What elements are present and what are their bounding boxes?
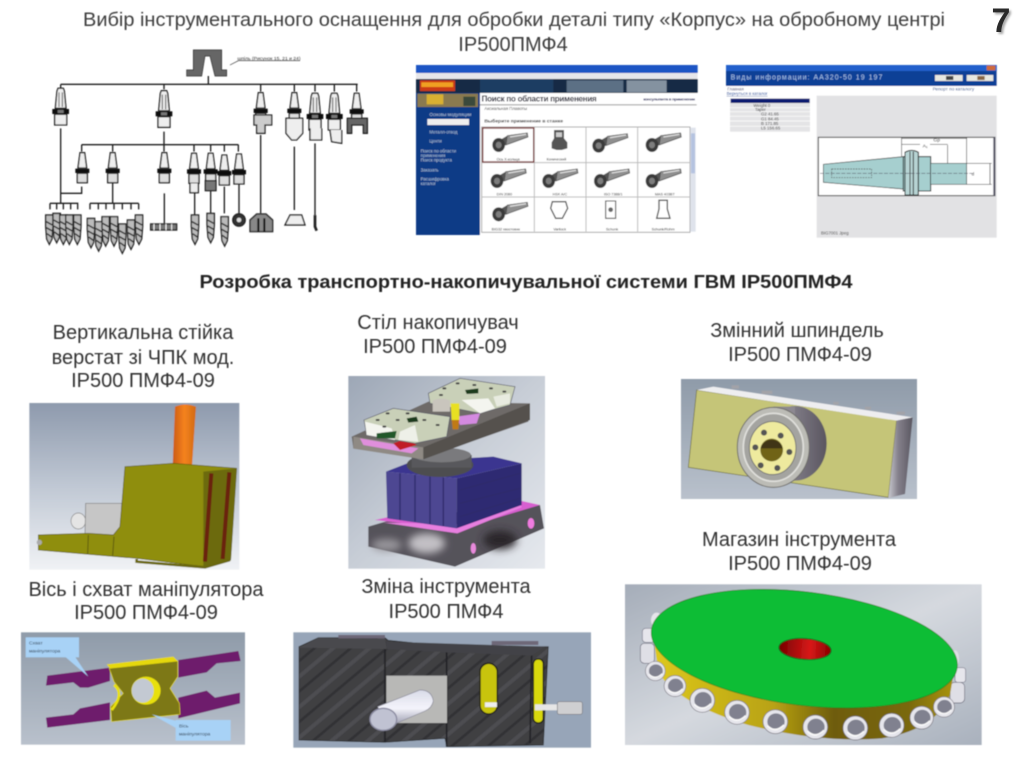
dark housing — [299, 635, 548, 747]
title: ІР500ПМФ4 — [458, 34, 568, 56]
caption: manipulator axis: ІР500 ПМФ4-09 — [74, 602, 218, 624]
tool holder drawing — [818, 137, 995, 196]
panel: replaceable spindle render — [681, 379, 917, 499]
callout: gripper: Схват — [29, 640, 43, 646]
tool thumbnails grid: HSK A/C — [553, 193, 567, 197]
caption: storage table — [357, 312, 519, 358]
window background — [726, 65, 997, 238]
caption: tool change: Зміна інструмента — [361, 576, 532, 598]
left navigation panel: Металл-отвод — [429, 130, 458, 135]
caption: manipulator axis: Вісь і схват маніпулятора — [28, 579, 264, 601]
caption: vertical stand: верстат зі ЧПК мод. — [52, 347, 234, 369]
left navigation panel — [416, 93, 480, 235]
tool sockets on rim — [645, 661, 954, 740]
yellow slots — [480, 659, 543, 723]
panel background — [293, 632, 591, 748]
lower row of holders — [75, 153, 246, 193]
tool thumbnails grid — [482, 127, 696, 232]
rear sockets — [640, 613, 966, 703]
panel background — [625, 584, 982, 745]
scheme connecting lines — [50, 76, 358, 223]
tool holder drawing: d — [972, 172, 975, 177]
caption: replaceable spindle — [710, 320, 884, 366]
panel background — [21, 632, 245, 745]
sub header links — [727, 86, 975, 96]
drawing caption: BIG7001 Jpeg — [821, 230, 849, 235]
parameters table: Weight 0 — [753, 103, 771, 108]
parameters table: L5 156.65 — [761, 126, 781, 131]
parameters table: B 171.85 — [761, 121, 779, 126]
sub header links: Главная — [727, 86, 744, 91]
olive body — [37, 463, 237, 567]
content area: Аксиальная Плавоты — [484, 106, 527, 111]
left navigation panel: применения — [421, 153, 446, 158]
scheme root: spindle — [187, 50, 301, 76]
left navigation panel: Расшифровка — [421, 176, 450, 181]
slide number: 7 — [992, 2, 1010, 40]
tool thumbnails grid: ISO 7388/1 — [604, 193, 622, 197]
tool thumbnails grid: Schunk/Rohm — [652, 227, 675, 231]
panel: manipulator render — [21, 632, 245, 745]
panel: vertical stand render — [29, 403, 239, 570]
caption: tool change: ІР500 ПМФ4 — [389, 601, 503, 623]
callout: axis — [152, 714, 231, 741]
fixtures on pallet — [364, 378, 515, 443]
right cutters and inserts — [151, 213, 317, 246]
sub header links: Вернуться в каталог — [727, 91, 768, 96]
panel: tool magazine render — [625, 574, 982, 745]
caption: vertical stand: ІР500 ПМФ4-09 — [71, 370, 215, 392]
section heading: Розробка транспортно-накопичувальної системи ГВМ ІР500ПМФ4 — [200, 271, 853, 292]
tool thumbnails grid: BIG32 хвостовик — [492, 227, 520, 231]
spindle cylinder — [737, 406, 827, 487]
rotary cylinder — [407, 448, 473, 477]
upper row of holders — [52, 88, 367, 143]
panel: storage table render — [348, 376, 545, 569]
tool thumbnails grid: Varilock — [553, 227, 566, 231]
scheme root: spindle: шпіль (Рисунок 15, 21 и 24) — [237, 56, 301, 62]
tooling scheme diagram — [46, 50, 367, 253]
tool thumbnails grid: Schunk — [606, 227, 618, 231]
tool thumbnails grid: MAS 403BT — [655, 193, 675, 197]
blue header: Виды информации: AA320-50 19 197 — [731, 75, 882, 82]
caption: storage table: Стіл накопичувач — [357, 312, 519, 334]
panel background — [348, 376, 545, 569]
tool thumbnails grid: DIN 2080 — [497, 193, 512, 197]
left navigation panel: каталог — [421, 181, 436, 186]
spindle block — [688, 385, 913, 498]
content area: Выберите применение в станке — [484, 118, 563, 125]
window menu bar — [416, 73, 698, 79]
parameters table — [730, 98, 810, 132]
content area: Поиск по области применения — [482, 95, 597, 104]
window title bar — [416, 65, 698, 73]
caption: tool magazine — [702, 529, 897, 575]
parameters table: Taper — [755, 107, 766, 112]
screenshot: tool information window — [726, 65, 997, 238]
tool holder drawing: A₁ — [923, 143, 928, 149]
violet block — [386, 457, 522, 528]
banner — [416, 79, 698, 93]
tool thumbnails grid: Конический — [547, 158, 566, 162]
caption: vertical stand: Вертикальна стійка — [53, 322, 234, 344]
left cutter cluster — [46, 213, 81, 244]
callout: axis: маніпулятора — [179, 731, 211, 737]
middle cutter cluster — [87, 215, 143, 253]
window and pin — [370, 676, 447, 730]
panel background — [681, 379, 917, 499]
left navigation panel: Поиск продукта — [421, 158, 452, 163]
purple gripper arms — [46, 651, 241, 728]
caption: tool change — [361, 576, 532, 623]
caption: tool magazine: ІР500 ПМФ4-09 — [728, 553, 872, 575]
title — [83, 9, 945, 56]
caption: replaceable spindle: ІР500 ПМФ4-09 — [728, 344, 872, 366]
center hole — [778, 637, 832, 661]
caption: storage table: ІР500 ПМФ4-09 — [363, 336, 507, 358]
orange column — [173, 404, 196, 467]
panel: tool change render — [293, 632, 591, 748]
sub header links: Репорт по каталогу — [933, 86, 975, 91]
parameters table: G1 84.45 — [761, 116, 779, 121]
marble base — [368, 501, 544, 567]
content area: консультанта в применении — [643, 96, 696, 101]
left navigation panel: Центи — [429, 139, 442, 144]
panel background — [29, 403, 239, 570]
callout: axis: Вісь — [179, 723, 189, 729]
green disk — [645, 574, 964, 724]
yellow carriage — [107, 657, 180, 722]
tool thumbnails grid: Ось Х-кольца — [497, 158, 521, 162]
parameters table: G2 41.65 — [761, 112, 779, 117]
caption: manipulator axis — [28, 579, 264, 624]
gold rim — [654, 638, 953, 739]
left navigation panel: Основы модуляции — [429, 112, 472, 117]
screenshot: application window search — [416, 65, 698, 235]
drawing background — [817, 96, 997, 238]
left navigation panel: Поиск по области — [421, 148, 457, 153]
callout: gripper — [26, 637, 88, 677]
left navigation panel: Заказать — [421, 167, 439, 172]
caption: vertical stand — [52, 322, 234, 392]
title: Вибір інструментального оснащення для обробки деталі типу «Корпус» на обробному центрі — [83, 9, 945, 31]
blue header — [726, 65, 997, 86]
caption: tool magazine: Магазин інструмента — [702, 529, 897, 551]
tool holder drawing: Gp — [933, 138, 940, 144]
caption: replaceable spindle: Змінний шпиндель — [710, 320, 884, 342]
content area — [480, 93, 698, 235]
pallet plate — [352, 402, 530, 459]
callout: gripper: маніпулятора — [29, 648, 61, 654]
side pin — [535, 702, 582, 714]
grey block and pin — [71, 503, 122, 535]
